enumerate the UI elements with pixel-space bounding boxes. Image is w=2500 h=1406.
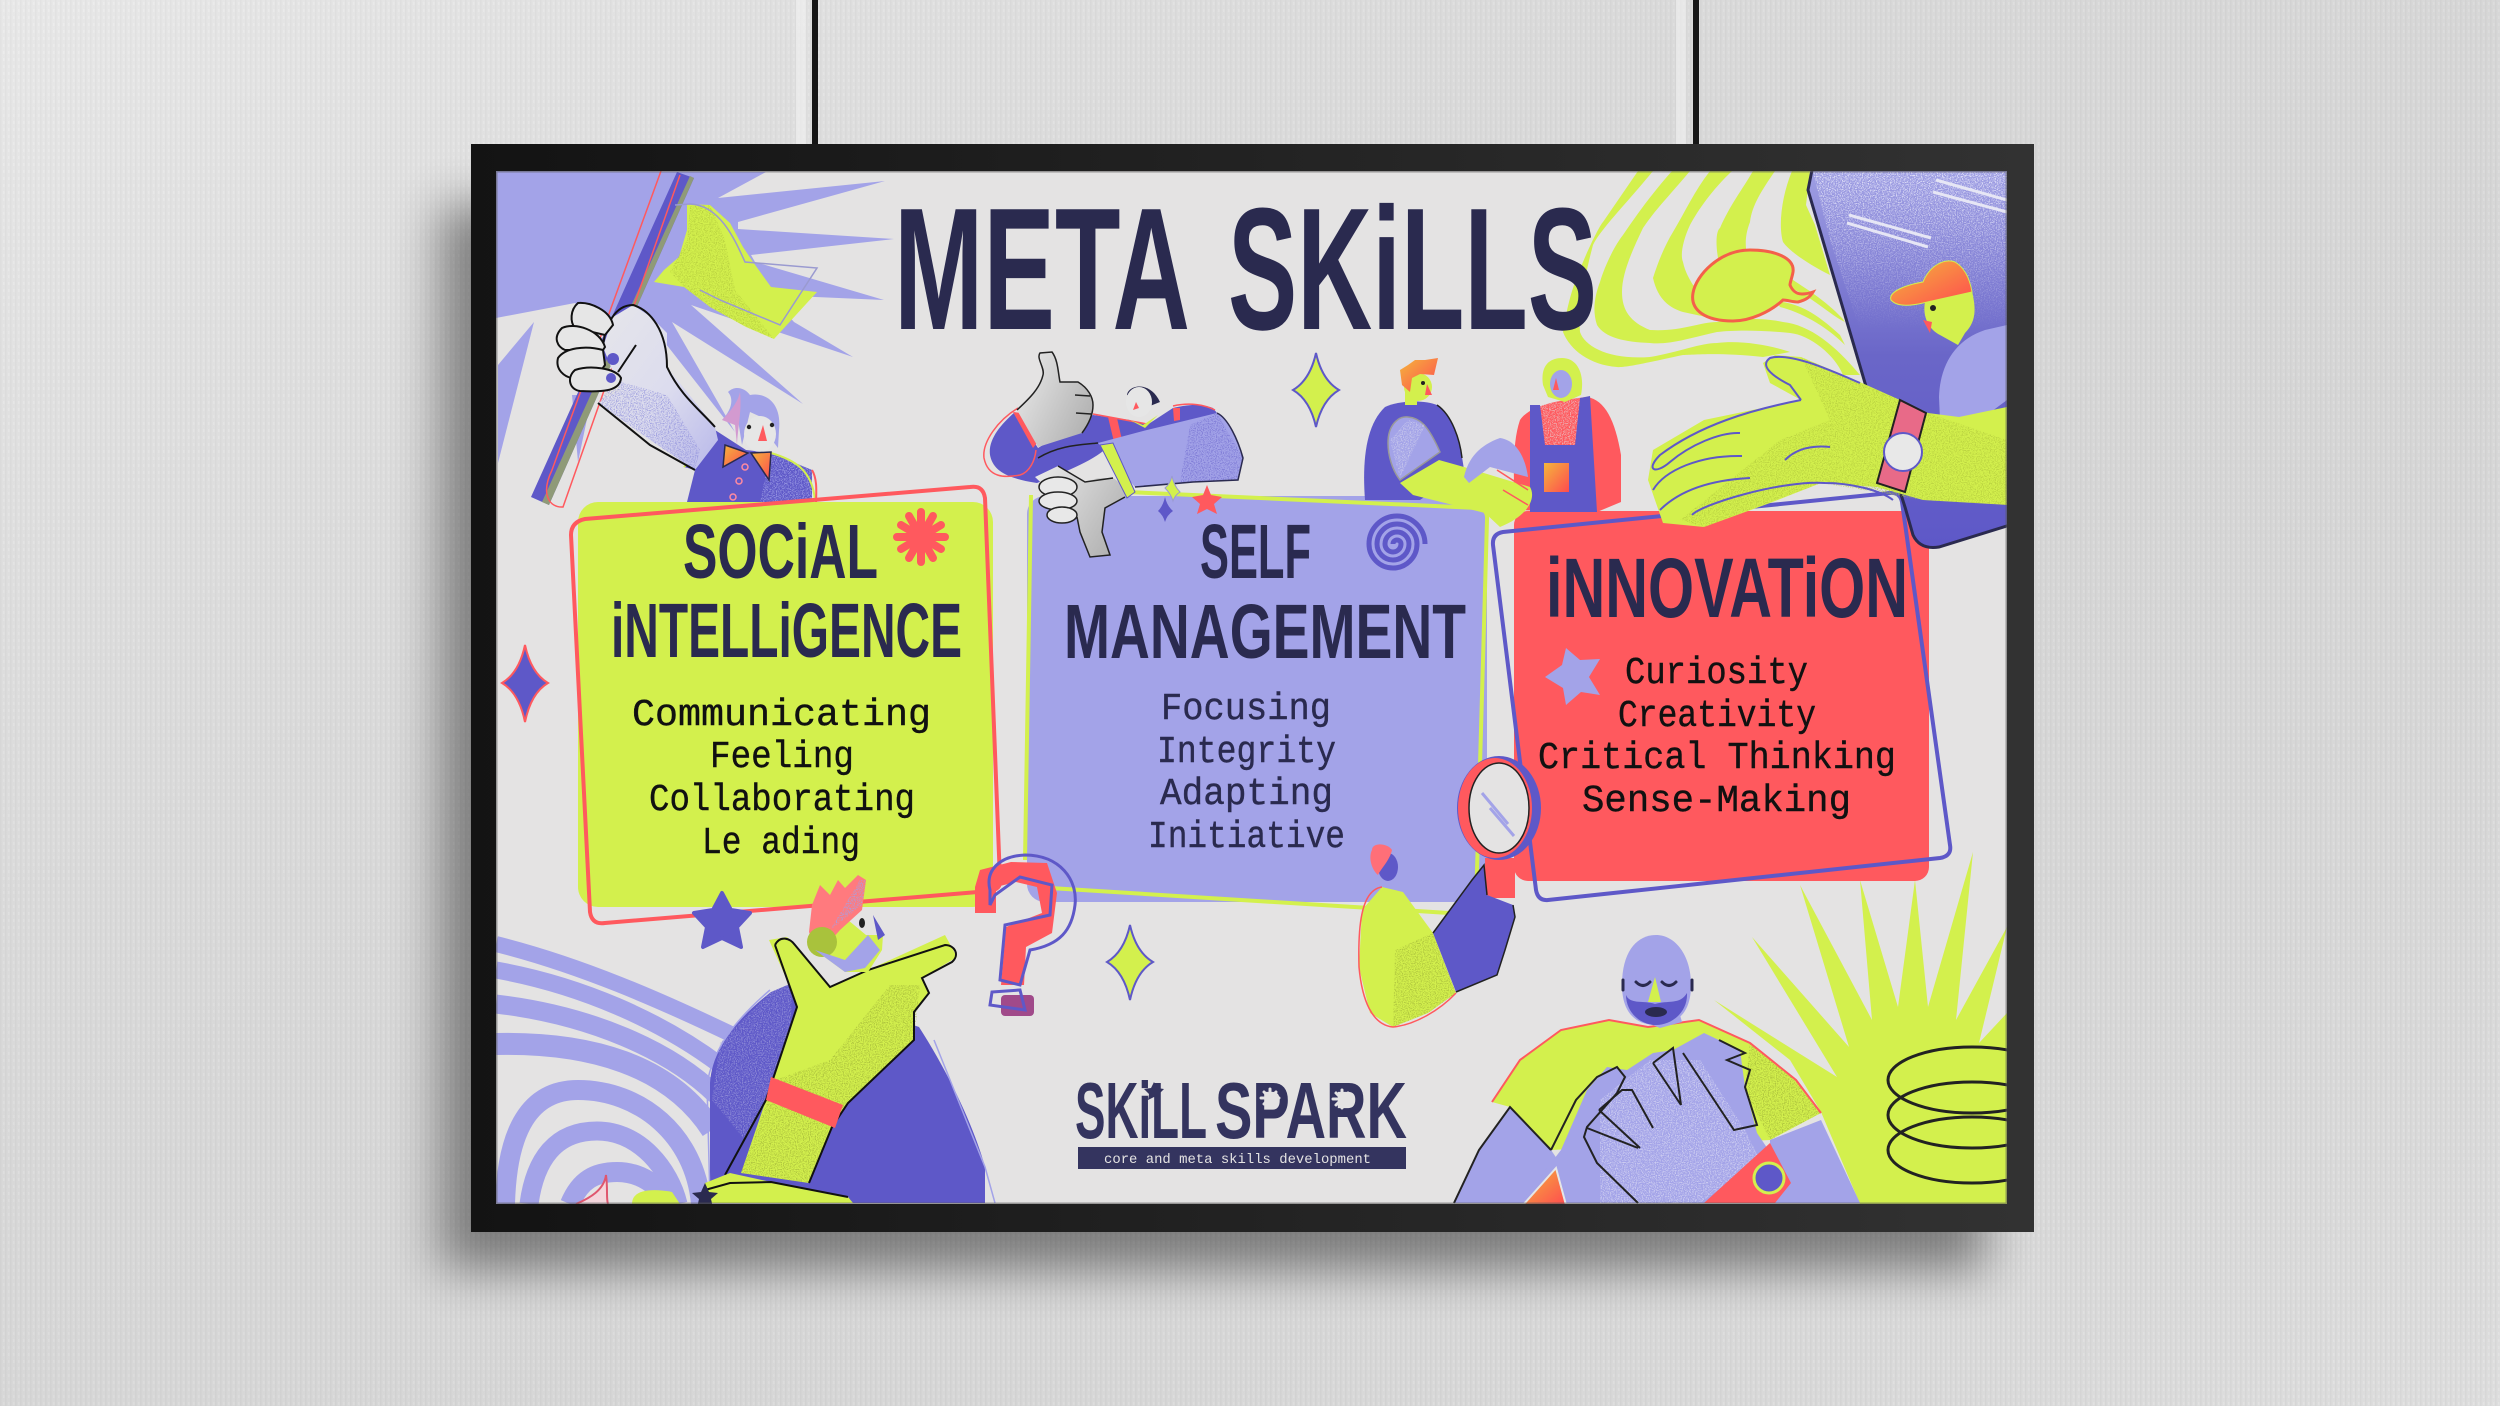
heading: self management: MANAGEMENT xyxy=(1064,589,1466,675)
small lime and red shapes in arc centre xyxy=(576,1175,680,1204)
illustration: thumbs figure xyxy=(984,352,1243,557)
poster artwork xyxy=(496,165,2056,1208)
illustration: flag xyxy=(654,204,817,339)
body: self management list: Integrity xyxy=(1157,731,1336,774)
body: social intelligence list: Le ading xyxy=(702,822,860,865)
illustration: woman behind social card xyxy=(684,388,816,505)
logo: skill spark xyxy=(1075,1066,1407,1169)
illustration: large lime reaching hand xyxy=(1648,355,2010,527)
illustration: pointing figure head xyxy=(807,875,885,972)
body: self management list: Focusing xyxy=(1161,688,1331,731)
heading: social intelligence: iNTELLiGENCE xyxy=(611,588,962,674)
body: innovation list: Critical Thinking xyxy=(1538,737,1896,780)
lavender arcs bottom left xyxy=(496,944,735,1204)
body: innovation list: Sense-Making xyxy=(1582,780,1851,823)
body: social intelligence list: Feeling xyxy=(710,736,854,779)
icon: lime sparkle bottom xyxy=(1107,925,1153,1000)
body: self management list: Adapting xyxy=(1160,773,1333,816)
lime waves top right xyxy=(1563,171,1860,375)
logo: skill spark: core and meta skills development xyxy=(1104,1152,1371,1168)
heading: social intelligence xyxy=(614,522,960,658)
coil rings bottom right xyxy=(1886,1046,2007,1184)
body: innovation list: Creativity xyxy=(1618,695,1816,738)
icon: lavender star xyxy=(1545,648,1600,705)
lime burst bottom right xyxy=(1714,852,2007,1204)
logo: skill spark: SPARK xyxy=(1215,1066,1407,1155)
card: innovation background xyxy=(1514,511,1929,881)
blue outline: innovation card xyxy=(1493,493,1950,900)
illustration: hand holding magnifier xyxy=(1359,756,1541,1027)
main title xyxy=(901,202,1593,331)
body: social intelligence list: Collaborating xyxy=(649,779,915,822)
card: social intelligence background xyxy=(578,502,993,907)
heading: self management xyxy=(1068,524,1466,658)
icon: red asterisk xyxy=(897,512,945,562)
illustration: phone with man xyxy=(1808,165,2010,548)
lavender burst top left xyxy=(496,171,894,463)
heading: social intelligence: SOCiAL xyxy=(683,509,878,595)
frame shadow on wall xyxy=(440,205,1985,1270)
icon: blue star xyxy=(694,893,750,947)
hanging cables xyxy=(812,0,1699,145)
illustration: hand gripping flag xyxy=(557,303,718,470)
main title: SKiLLS xyxy=(1228,171,1597,366)
card: self management background xyxy=(1027,496,1487,902)
body: social intelligence list: Communicating xyxy=(632,694,931,737)
illustration: flag pole xyxy=(531,171,694,507)
icon: blue sparkle left xyxy=(502,645,548,722)
logo: skill spark: SKiLL xyxy=(1075,1066,1207,1155)
heading: innovation: iNNOVATiON xyxy=(1546,541,1908,635)
body: self management list xyxy=(1148,688,1345,859)
illustration: handshake woman xyxy=(1514,358,1621,512)
illustration: bald man with hand on chest xyxy=(1454,935,1860,1205)
illustration: pointing arm and hand xyxy=(692,935,957,1208)
icon: question mark xyxy=(975,855,1075,1016)
black frame xyxy=(471,144,2034,1232)
poster edge bevel xyxy=(496,171,2007,1204)
illustration: wristwatch xyxy=(1877,400,1926,492)
speech bubble xyxy=(1693,250,1813,321)
illustration: handshake man xyxy=(1364,358,1464,500)
body: self management list: Initiative xyxy=(1148,816,1345,859)
illustration: pointing figure body xyxy=(707,983,995,1203)
icon: spiral xyxy=(1369,516,1425,568)
illustration: clasped hands xyxy=(1400,438,1532,527)
body: innovation list xyxy=(1538,652,1896,823)
body: social intelligence list xyxy=(632,694,931,865)
heading: self management: SELF xyxy=(1200,509,1311,595)
lime outline: self management card xyxy=(1025,488,1487,914)
body: innovation list: Curiosity xyxy=(1625,652,1808,695)
icon: lime sparkle top xyxy=(1293,353,1339,427)
red outline: social card xyxy=(571,487,1000,923)
main title: META xyxy=(894,171,1190,366)
